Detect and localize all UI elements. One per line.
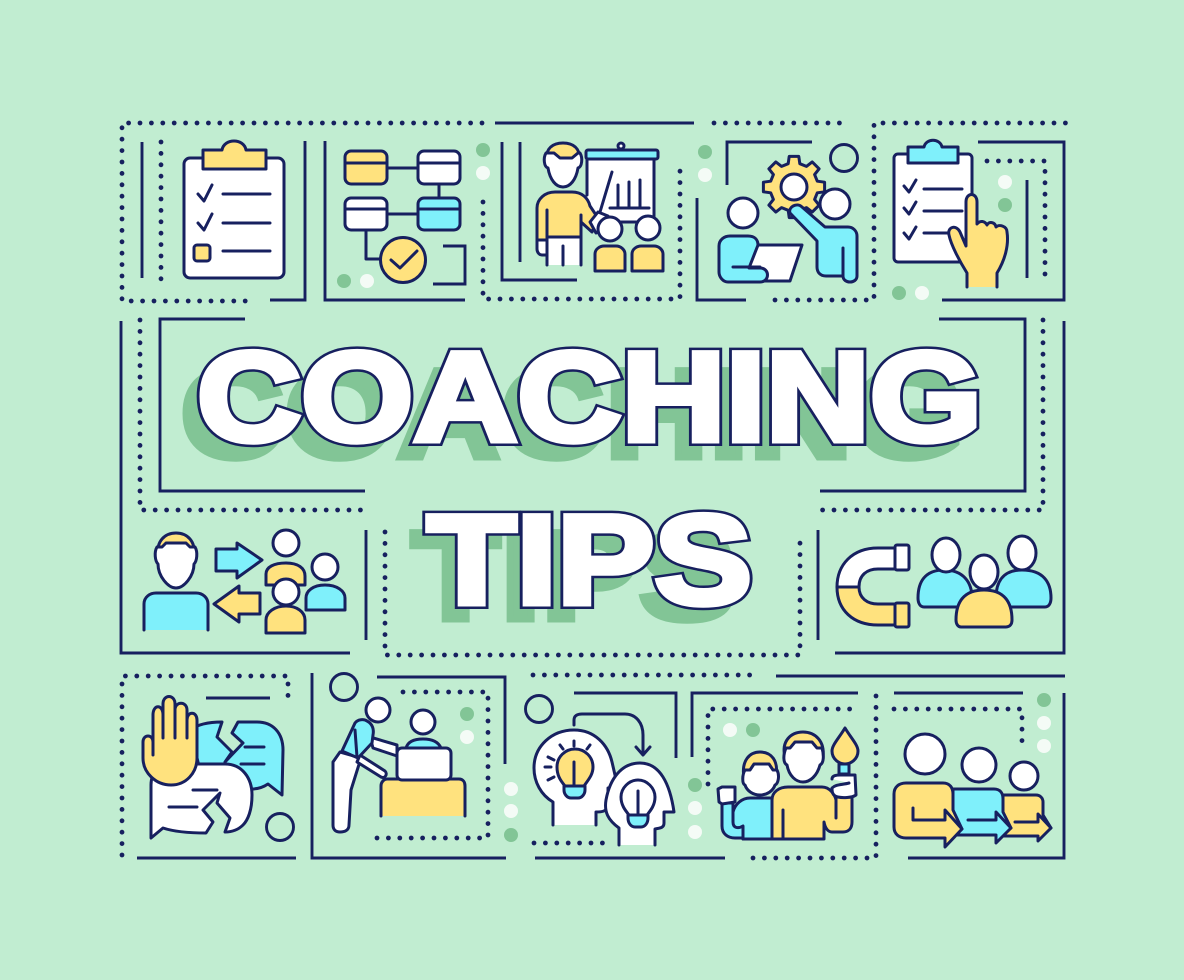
icon: magnet attracting people	[837, 536, 1051, 627]
icon: clipboard with pointing hand	[894, 140, 1008, 287]
title outline: TIPS	[427, 488, 752, 630]
title text: COACHING	[197, 326, 982, 468]
icon: flow chart with check	[345, 151, 460, 282]
icon: idea transfer between heads	[534, 714, 674, 845]
title outline	[197, 326, 982, 630]
icon: team with gear	[719, 156, 857, 282]
title shadow: TIPS	[411, 504, 736, 646]
icon: hand stopping broken speech bubbles	[143, 696, 283, 838]
title shadow: COACHING	[180, 342, 965, 484]
icon: team leader holding brush	[718, 728, 858, 839]
icon: presenter at board	[537, 143, 663, 271]
title outline: COACHING	[197, 326, 982, 468]
decorative frame lines and dots	[121, 123, 1066, 858]
title text: TIPS	[427, 488, 752, 630]
title text	[197, 326, 982, 630]
icon: team moving forward with arrows	[894, 734, 1051, 847]
icon: checklist clipboard	[184, 141, 284, 278]
title shadow	[180, 342, 965, 646]
icon: mentor helping at laptop	[333, 698, 465, 832]
icon: leader exchanging with team	[144, 530, 345, 633]
title: Coaching Tips	[180, 326, 982, 646]
